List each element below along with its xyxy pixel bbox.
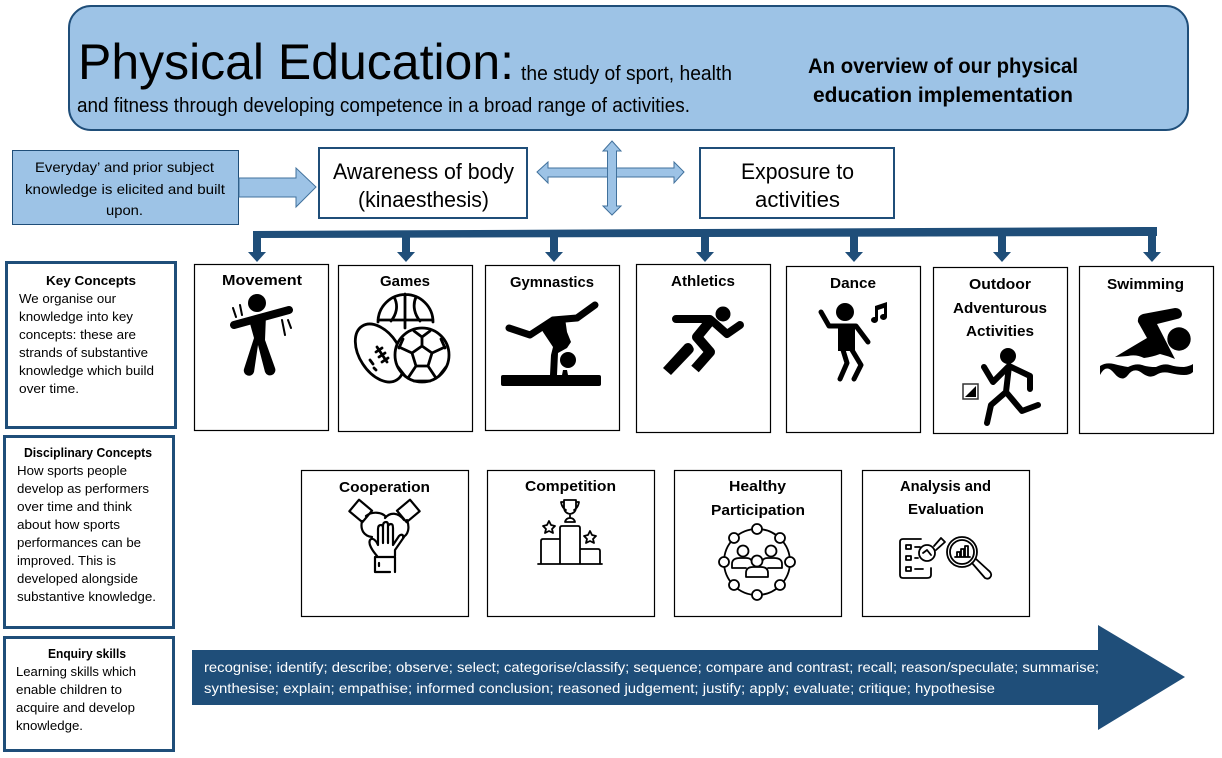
card: healthy participation: Participation <box>711 502 805 519</box>
icon: orienteering runner <box>963 348 1038 423</box>
card: healthy participation: Healthy <box>729 478 787 495</box>
exposure to activities box <box>700 148 894 218</box>
connector bracket with arrows <box>248 227 1161 262</box>
card: games: Games <box>380 273 430 290</box>
awareness of body box <box>319 148 527 218</box>
card: cooperation <box>302 470 468 616</box>
icon: podium with trophy <box>538 500 602 564</box>
icon: group in a circle <box>719 524 795 600</box>
card: swimming: Swimming <box>1107 276 1184 293</box>
panel: key concepts: We organise our <box>19 291 117 306</box>
panel: disciplinary concepts: How sports people <box>17 463 127 478</box>
awareness of body box: Awareness of body <box>333 159 514 184</box>
icon: sprinter <box>663 306 740 375</box>
overview subtitle: education implementation <box>813 84 1073 107</box>
panel: enquiry skills <box>4 638 174 750</box>
four-way arrow <box>537 141 684 215</box>
panel: enquiry skills: enable children to <box>16 682 122 697</box>
panel: enquiry skills: knowledge. <box>16 718 83 733</box>
card: healthy participation <box>674 470 842 616</box>
panel: key concepts: concepts: these are <box>19 327 136 342</box>
enquiry skills arrow: recognise; identify; describe; observe; select; categorise/classify; sequence; compare and contrast; recall; reason/speculate; summarise; <box>204 659 1099 675</box>
exposure to activities box: Exposure to <box>741 159 854 184</box>
card: swimming <box>1080 266 1214 434</box>
panel: disciplinary concepts: improved. This is <box>17 553 117 568</box>
icon: dancer with music note <box>821 302 887 379</box>
icon: sports balls <box>345 294 449 391</box>
icon: swimmer <box>1100 308 1193 379</box>
card: outdoor adventurous activities: Activities <box>966 323 1034 340</box>
overview subtitle: An overview of our physical <box>808 55 1078 78</box>
exposure to activities box: activities <box>755 187 840 212</box>
panel: key concepts: knowledge which build <box>19 363 154 378</box>
card: outdoor adventurous activities: Adventurous <box>953 300 1047 317</box>
header banner <box>69 6 1188 130</box>
card: competition: Competition <box>525 478 616 495</box>
definition text: and fitness through developing competence in a broad range of activities. <box>77 95 690 117</box>
panel: disciplinary concepts: developed alongside <box>17 571 138 586</box>
panel: disciplinary concepts: substantive knowledge. <box>17 589 156 604</box>
panel: disciplinary concepts: Disciplinary Concepts <box>24 445 152 460</box>
icon: joined hands <box>349 500 420 572</box>
card: gymnastics <box>486 266 620 430</box>
panel: key concepts: Key Concepts <box>46 273 136 288</box>
panel: disciplinary concepts: over time and think <box>17 499 133 514</box>
card: athletics: Athletics <box>671 273 735 290</box>
prior knowledge box <box>12 150 238 224</box>
enquiry skills arrow <box>192 625 1185 730</box>
panel: key concepts: over time. <box>19 381 79 396</box>
card: cooperation: Cooperation <box>339 479 430 496</box>
icon: gymnast on beam <box>501 305 601 386</box>
card: outdoor adventurous activities: Outdoor <box>969 276 1031 293</box>
panel: disciplinary concepts: about how sports <box>17 517 121 532</box>
card: analysis and evaluation: Evaluation <box>908 501 984 518</box>
card: athletics <box>636 264 770 432</box>
awareness of body box: (kinaesthesis) <box>358 187 489 212</box>
icon: movement figure <box>233 294 291 376</box>
panel: key concepts: strands of substantive <box>19 345 148 360</box>
arrow: prior knowledge to awareness <box>239 168 316 207</box>
card: outdoor adventurous activities <box>934 268 1068 434</box>
card: movement: Movement <box>222 272 302 289</box>
card: games <box>338 266 472 432</box>
panel: disciplinary concepts <box>4 436 174 628</box>
panel: disciplinary concepts: performances can be <box>17 535 141 550</box>
card: gymnastics: Gymnastics <box>510 274 594 291</box>
definition text: the study of sport, health <box>521 63 732 85</box>
panel: enquiry skills: Learning skills which <box>16 664 136 679</box>
definition text <box>77 63 732 117</box>
card: dance <box>786 266 920 432</box>
card: analysis and evaluation: Analysis and <box>900 478 991 495</box>
card: competition <box>488 470 654 616</box>
panel: key concepts <box>6 262 176 428</box>
overview subtitle <box>808 55 1078 107</box>
prior knowledge box: knowledge is elicited and built <box>25 181 225 197</box>
card: dance: Dance <box>830 275 876 292</box>
panel: enquiry skills: acquire and develop <box>16 700 135 715</box>
enquiry skills arrow: synthesise; explain; empathise; informed conclusion; reasoned judgement; justify; apply; evaluate; critique; hypothesise <box>204 680 995 696</box>
title: Physical Education: <box>78 34 514 90</box>
card: movement <box>194 264 328 430</box>
prior knowledge box: Everyday’ and prior subject <box>35 159 214 175</box>
prior knowledge box: upon. <box>106 202 143 218</box>
panel: disciplinary concepts: develop as performers <box>17 481 150 496</box>
icon: checklist and magnifiers <box>900 537 991 579</box>
panel: enquiry skills: Enquiry skills <box>48 646 126 661</box>
card: analysis and evaluation <box>862 470 1030 616</box>
panel: key concepts: knowledge into key <box>19 309 134 324</box>
